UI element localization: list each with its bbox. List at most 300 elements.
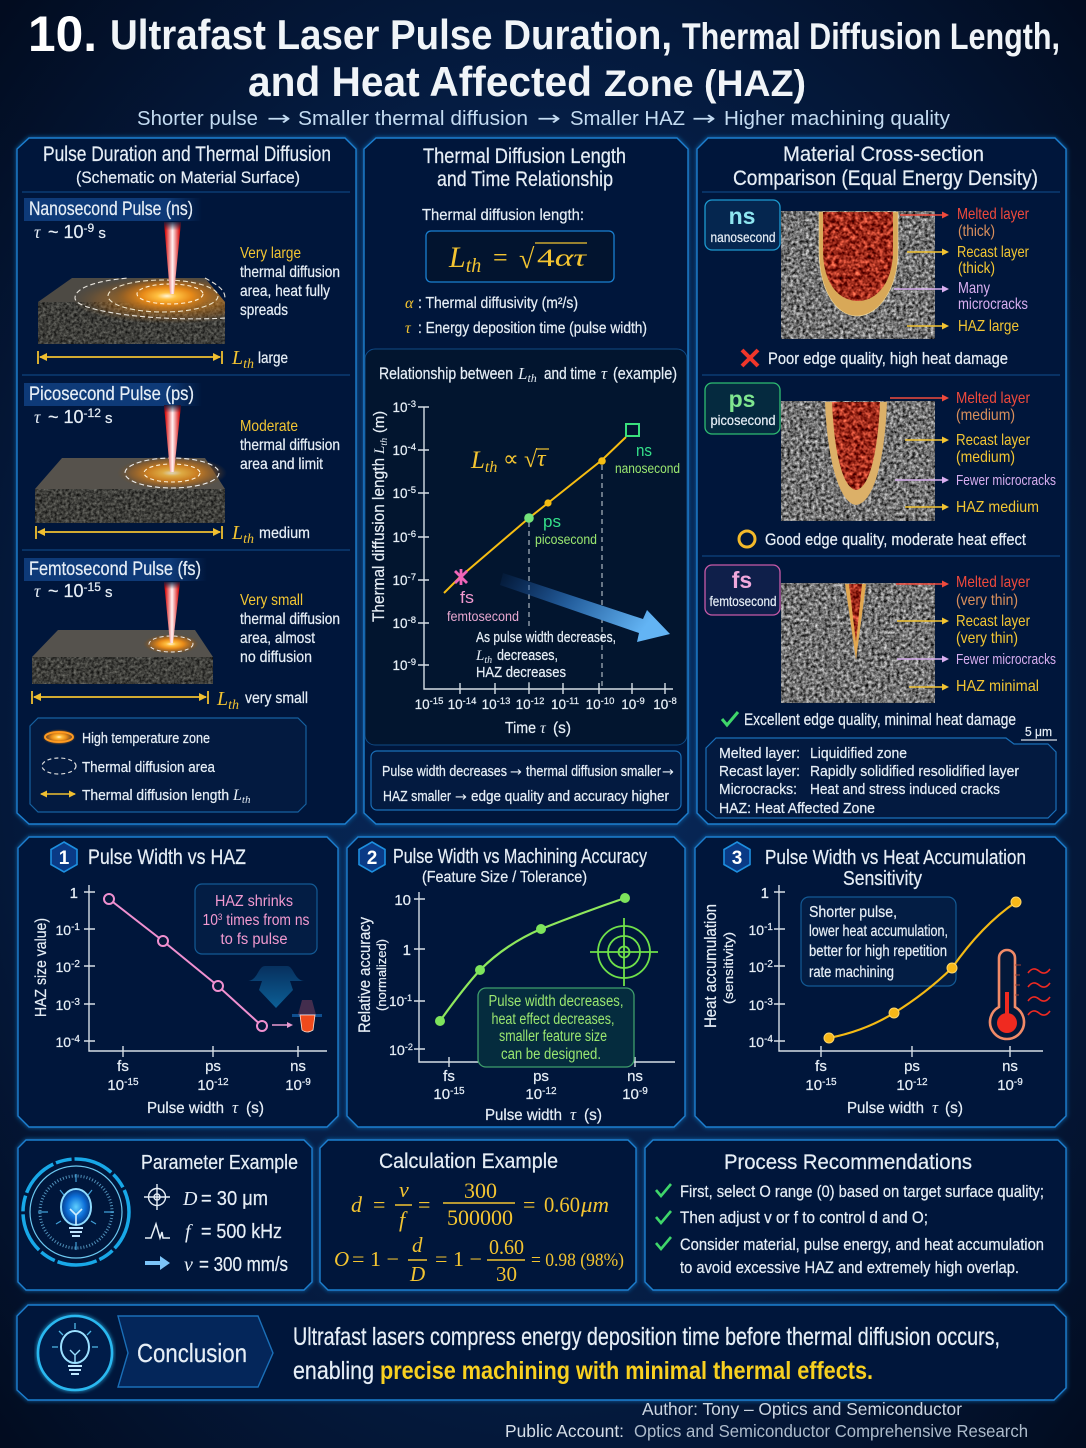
y axis tick labels: -9 (408, 657, 416, 668)
arrow: Lth very small (32, 688, 308, 713)
icon: laser beam ps (164, 405, 181, 472)
formula label: Thermal diffusion length: (422, 207, 584, 224)
line chart: HAZ: -2 (71, 959, 80, 970)
title: and Heat Affected (248, 58, 592, 105)
line chart: HAZ: -9 (302, 1077, 311, 1088)
fs callouts: Melted layer (956, 574, 1031, 591)
panel heading (43, 143, 331, 187)
line chart: heat accumulation: 10 (997, 1077, 1014, 1094)
chart annotation: L (476, 648, 484, 664)
axis titles: th (379, 438, 390, 446)
ns callouts: Melted layer (957, 206, 1030, 223)
y axis tick labels: -5 (408, 485, 416, 496)
x axis tick labels: -13 (497, 696, 510, 707)
panel heading: Pulse Duration and Thermal Diffusion (43, 143, 331, 166)
title: Zone (HAZ) (604, 63, 806, 104)
line chart: accuracy: 10 (433, 1086, 450, 1103)
icon: heat waves (1028, 969, 1050, 1015)
line chart: heat accumulation: -12 (913, 1077, 928, 1088)
ns comparison row (705, 200, 1030, 368)
heading: Pulse Width vs HAZ (88, 845, 246, 869)
summary box: thermal diffusion smaller (526, 763, 661, 780)
fs callouts: (very thin) (956, 592, 1018, 609)
author credit: Author: Tony – Optics and Semiconductor (642, 1399, 962, 1419)
chart title: L (518, 364, 527, 383)
line chart: heat accumulation: fs (815, 1058, 827, 1075)
chart annotation: decreases, (497, 647, 558, 664)
callout: HAZ shrinks: times from ns (222, 912, 310, 929)
variable definitions: τ (405, 320, 412, 337)
y axis tick labels: -7 (408, 572, 416, 583)
ns badge: nanosecond (710, 229, 776, 245)
formula box: = (493, 243, 508, 272)
formula: line spacing: 500000 (447, 1205, 513, 1230)
line chart: HAZ: 10 (56, 922, 71, 938)
conclusion text (293, 1323, 1000, 1385)
y axis tick labels: 10 (393, 486, 408, 501)
femtosecond section (24, 558, 340, 713)
panel: thermal diffusion length and time relationship (364, 138, 688, 824)
chart annotation (475, 629, 616, 681)
y axis tick labels (393, 399, 416, 673)
ns label: nanosecond (615, 461, 680, 476)
arrow: Lth very small: very small (245, 690, 308, 707)
picosecond section: s (101, 410, 113, 427)
formula: line spacing: μm (580, 1192, 609, 1217)
glossary box: HAZ: Heat Affected Zone (719, 800, 875, 817)
icon: number badge 2 (359, 842, 385, 872)
glossary box (706, 738, 1056, 818)
heading: (Feature Size / Tolerance) (422, 869, 587, 886)
parameter f: = 500 kHz (201, 1221, 282, 1243)
title: 10. (28, 6, 97, 62)
picosecond section (24, 383, 340, 547)
variable definitions: : Thermal diffusivity (m²/s) (418, 295, 578, 312)
line chart: accuracy: 10 (389, 993, 405, 1009)
fs label (447, 588, 519, 624)
axis titles: L (372, 446, 388, 454)
axis titles: τ (540, 720, 547, 737)
glossary box: Heat and stress induced cracks (810, 781, 1000, 798)
formula: overlap: D (409, 1262, 425, 1286)
femtosecond section: ~ 10 (48, 581, 84, 601)
legend: high temperature zone: High temperature zone (82, 730, 210, 747)
fs callouts (896, 574, 1056, 695)
formula: overlap: = 0.98 (98%) (531, 1250, 624, 1271)
summary box: → (662, 765, 674, 780)
line chart: HAZ: fs (117, 1058, 129, 1075)
subtitle: Higher machining quality (724, 108, 950, 130)
ps label (535, 512, 597, 547)
variable definitions: : Energy deposition time (pulse width) (418, 320, 647, 337)
y axis tick labels: -6 (408, 529, 416, 540)
line chart: accuracy: Pulse width (485, 1107, 562, 1124)
thermal area note ns: Very large (240, 245, 301, 262)
callout: shorter pulse: rate machining (809, 964, 894, 981)
public account credit: Public Account: (505, 1421, 624, 1441)
line chart: HAZ: (s) (246, 1100, 264, 1117)
y axis tick labels: 10 (393, 616, 408, 631)
parameter v: = 300 mm/s (199, 1254, 288, 1276)
arrow: Lth very small: L (217, 688, 228, 710)
summary box (371, 751, 681, 810)
line chart: heat accumulation: ps (904, 1058, 920, 1075)
y axis tick labels: -4 (408, 442, 416, 453)
line chart: accuracy: -9 (639, 1086, 648, 1097)
formula: line spacing: 0.60 (544, 1192, 580, 1217)
subtitle: → (692, 106, 716, 130)
ns callouts: Many (958, 280, 990, 297)
panel heading: (Schematic on Material Surface) (76, 168, 300, 187)
icon: thermometer (990, 950, 1024, 1039)
summary box: Pulse width decreases (382, 763, 507, 780)
y axis tick labels: 10 (393, 400, 408, 415)
callout: HAZ shrinks: HAZ shrinks (215, 893, 293, 910)
picosecond section: τ (34, 407, 41, 427)
line chart: accuracy: 10 (394, 892, 411, 909)
recommendation 3 (656, 1235, 1044, 1277)
legend: thermal diffusion area: Thermal diffusion area (82, 759, 216, 776)
fs cross-section image (781, 583, 935, 703)
thermal area note ps: Moderate (240, 418, 298, 435)
parameter f (145, 1221, 282, 1243)
parameter v (145, 1254, 288, 1276)
ps verdict: Good edge quality, moderate heat effect (765, 531, 1026, 549)
glossary box: Recast layer: (719, 763, 800, 780)
ns callouts: Recast layer (957, 244, 1030, 261)
fs callouts: (very thin) (956, 630, 1018, 647)
y axis tick labels: 10 (393, 573, 408, 588)
heading: Sensitivity (843, 868, 922, 890)
ps callouts: Fewer microcracks (956, 472, 1056, 489)
arrow: downward shrink (247, 966, 305, 1008)
ps label: ps (543, 512, 561, 531)
legend: thermal diffusion length: L (233, 787, 242, 804)
line chart: accuracy: (normalized) (374, 939, 389, 1011)
title (28, 6, 1060, 105)
x axis tick labels: 10 (551, 697, 566, 712)
summary box: edge quality and accuracy higher (471, 788, 669, 805)
panel heading: Comparison (Equal Energy Density) (733, 166, 1038, 190)
parameter D: = 30 μm (201, 1188, 268, 1210)
heading: Calculation Example (379, 1149, 558, 1173)
ns callouts: (thick) (958, 223, 995, 240)
conclusion text: precise machining with minimal thermal effects. (380, 1357, 873, 1385)
line chart: accuracy (355, 892, 675, 1124)
x axis tick labels: 10 (415, 697, 430, 712)
thermal area note fs: thermal diffusion (240, 611, 340, 628)
panel heading (423, 144, 626, 191)
panel: process recommendations (645, 1140, 1066, 1290)
line chart: accuracy: (s) (584, 1107, 602, 1124)
line chart: accuracy: -15 (450, 1086, 465, 1097)
conclusion label (118, 1316, 273, 1387)
formula: line spacing: f (399, 1207, 408, 1232)
x axis tick labels: -9 (636, 696, 645, 707)
line chart: HAZ: -4 (71, 1034, 80, 1045)
legend: high temperature zone (42, 729, 210, 747)
arrow: Lth medium: medium (259, 525, 310, 542)
line chart: HAZ: -3 (71, 997, 80, 1008)
nanosecond section: τ (34, 222, 41, 242)
line chart: HAZ: HAZ size value) (33, 918, 50, 1017)
y axis tick labels: 10 (393, 530, 408, 545)
legend: thermal diffusion length: Thermal diffusion length (82, 787, 229, 804)
icon: number badge 3: 3 (732, 848, 742, 869)
x axis tick labels: -10 (601, 696, 614, 707)
parameter v: v (184, 1254, 193, 1276)
proportionality label: τ (537, 446, 547, 472)
nanosecond section (24, 198, 340, 372)
summary box: → (455, 790, 467, 805)
panel: pulse width vs machining accuracy (347, 837, 685, 1127)
ns label (615, 441, 680, 476)
recommendation 2: Then adjust v or f to control d and O; (680, 1208, 928, 1227)
line chart: HAZ: ps (205, 1058, 221, 1075)
conclusion text: enabling (293, 1357, 374, 1385)
ps callouts: HAZ medium (956, 499, 1039, 516)
legend: thermal diffusion length: th (242, 794, 251, 806)
thermal area note ps: area and limit (240, 456, 323, 473)
x axis tick labels: 10 (516, 697, 531, 712)
heading: Pulse Width vs Heat Accumulation (765, 847, 1026, 869)
subtitle: Shorter pulse (137, 108, 258, 130)
y axis tick labels: -8 (408, 615, 416, 626)
line chart: heat accumulation: 10 (749, 922, 764, 938)
thermal area note fs: no diffusion (240, 649, 312, 666)
subtitle: → (267, 106, 291, 130)
line chart: accuracy: fs (443, 1068, 455, 1085)
line chart: accuracy: ns (627, 1068, 643, 1085)
fs badge: femtosecond (710, 593, 776, 609)
line chart: heat accumulation: 10 (805, 1077, 822, 1094)
ns badge: ns (729, 203, 755, 229)
chart title: τ (601, 364, 608, 383)
panel: calculation example (320, 1140, 636, 1290)
line chart: accuracy: 10 (389, 1042, 405, 1058)
femtosecond section: Femtosecond Pulse (fs) (29, 559, 201, 580)
femtosecond section: τ (34, 581, 41, 601)
line chart: heat accumulation: 10 (749, 997, 764, 1013)
arrow: Lth medium: L (232, 522, 243, 544)
callout: shorter pulse (801, 897, 956, 986)
line chart: accuracy: Relative accuracy (355, 917, 374, 1033)
fs comparison row (705, 565, 1056, 729)
arrow: Lth large: L (232, 347, 243, 369)
ps cross-section image (781, 401, 935, 521)
x axis tick labels (415, 696, 677, 712)
x axis tick labels: 10 (586, 697, 601, 712)
line chart: heat accumulation: (s) (945, 1100, 963, 1117)
parameter D: D (182, 1188, 198, 1210)
arrow: Lth large: th (243, 357, 254, 372)
fs label: femtosecond (447, 609, 519, 624)
arrow: Lth medium: th (243, 532, 254, 547)
panel: conclusion (17, 1305, 1066, 1400)
proportionality label: L (471, 447, 485, 474)
line chart: HAZ: Pulse width (147, 1100, 224, 1117)
line chart: accuracy: 10 (622, 1086, 639, 1103)
axis titles: (m) (371, 411, 388, 433)
icon: laser beam ns (164, 222, 181, 294)
chart annotation: HAZ decreases (476, 664, 566, 681)
formula: overlap: = 1 − (435, 1247, 482, 1271)
line chart: heat accumulation: 10 (896, 1077, 913, 1094)
thermal area note ps (240, 418, 340, 473)
title: Ultrafast Laser Pulse Duration, (110, 11, 672, 58)
line chart: heat accumulation: -2 (764, 959, 773, 970)
line chart: HAZ: 10 (56, 997, 71, 1013)
icon: conclusion bulb (38, 1316, 112, 1390)
line chart: HAZ: 10 (285, 1077, 302, 1094)
thermal area note ns: spreads (240, 302, 288, 319)
thermal area note ns (240, 245, 340, 319)
axis titles (370, 411, 571, 737)
line chart: HAZ (33, 885, 327, 1117)
heading: Parameter Example (141, 1151, 298, 1174)
panel heading: and Time Relationship (437, 167, 613, 191)
y axis tick labels: 10 (393, 443, 408, 458)
ns callouts: (thick) (958, 260, 995, 277)
parameter f: f (185, 1221, 193, 1243)
x axis tick labels: 10 (448, 697, 463, 712)
proportionality label: th (485, 459, 497, 476)
glossary box: Rapidly solidified resolidified layer (810, 763, 1019, 780)
line chart: HAZ: 10 (107, 1077, 124, 1094)
femtosecond section: -15 (84, 580, 101, 594)
chart: Lth vs time (365, 349, 687, 745)
callout: feature size: smaller feature size (499, 1028, 607, 1045)
formula: line spacing: = (373, 1192, 385, 1217)
proportionality label: √ (524, 447, 538, 473)
line chart: heat accumulation: -9 (1014, 1077, 1023, 1088)
ps callouts: Melted layer (956, 390, 1031, 407)
x axis tick labels: 10 (653, 697, 668, 712)
summary box: → (510, 765, 522, 780)
formula: line spacing: = (418, 1192, 430, 1217)
icon: laser beam fs (164, 582, 180, 643)
line chart: accuracy: τ (570, 1105, 577, 1124)
line chart: HAZ: -12 (214, 1077, 229, 1088)
nanosecond section: ~ 10 (48, 222, 84, 242)
glossary box: Melted layer: (719, 745, 800, 762)
axis titles: (s) (553, 720, 571, 737)
line chart: accuracy: ps (533, 1068, 549, 1085)
x axis tick labels: 10 (482, 697, 497, 712)
callout: feature size (478, 988, 634, 1067)
thermal area note ns: area, heat fully (240, 283, 330, 300)
line chart: HAZ: 1 (70, 885, 78, 902)
heading (393, 846, 647, 886)
arrow: to crater (272, 1022, 293, 1028)
formula: line spacing: = (523, 1192, 535, 1217)
icon: light bulb gauge (23, 1159, 129, 1265)
icon: small HAZ crater (292, 1000, 322, 1032)
formula: overlap: 30 (496, 1262, 517, 1286)
glossary box: Liquidified zone (810, 745, 907, 762)
line chart: heat accumulation: 10 (749, 1034, 764, 1050)
chart title: (example) (613, 365, 677, 383)
x axis tick labels: -12 (531, 696, 544, 707)
arrow: Lth large (38, 347, 288, 372)
panel heading: Material Cross-section (783, 142, 984, 166)
line chart: HAZ: 10 (56, 1034, 71, 1050)
x axis tick labels: -11 (566, 696, 579, 707)
callout: shorter pulse: lower heat accumulation, (809, 923, 948, 940)
public account credit: Optics and Semiconductor Comprehensive Research (634, 1421, 1028, 1441)
callout: HAZ shrinks: to fs pulse (220, 931, 288, 948)
icon: number badge 1 (51, 842, 77, 872)
formula: line spacing: v (399, 1177, 409, 1202)
icon: material block ps (35, 456, 227, 523)
line chart: HAZ: 10 (56, 959, 71, 975)
formula: overlap: O (334, 1247, 349, 1271)
icon: number badge 1: 1 (59, 848, 70, 869)
subtitle: Smaller thermal diffusion (298, 108, 528, 130)
line chart: heat accumulation: 10 (749, 959, 764, 975)
callout: shorter pulse: better for high repetition (809, 943, 947, 960)
conclusion label: Conclusion (137, 1338, 247, 1368)
axis titles: Thermal diffusion length (370, 458, 388, 622)
fs callouts: HAZ minimal (956, 678, 1039, 695)
panel: parameter example (18, 1140, 312, 1290)
formula box: th (466, 255, 481, 277)
ns badge (705, 200, 780, 250)
nanosecond section: s (94, 225, 106, 242)
formula: line spacing (351, 1177, 609, 1232)
fs verdict: Excellent edge quality, minimal heat damage (744, 711, 1016, 729)
fs callouts: Fewer microcracks (956, 651, 1056, 668)
ps callouts (890, 390, 1056, 516)
heading (765, 847, 1026, 890)
fs callouts: Recast layer (956, 613, 1031, 630)
ns cross-section image (781, 211, 935, 339)
ps comparison row (705, 383, 1056, 549)
panel: pulse duration and thermal diffusion (17, 138, 356, 824)
arrow: Lth medium (36, 522, 310, 547)
femtosecond section: s (101, 584, 113, 601)
line chart: heat accumulation: (sensitivity) (721, 932, 736, 1004)
line chart: heat accumulation: -4 (764, 1034, 773, 1045)
nanosecond section: -9 (84, 221, 95, 235)
fs badge: fs (732, 567, 752, 593)
fs marker (455, 569, 467, 585)
icon: material block fs (32, 630, 213, 684)
heading: Pulse Width vs Machining Accuracy (393, 846, 647, 868)
ps badge: ps (729, 386, 755, 412)
y axis tick labels: -3 (408, 399, 416, 410)
axis titles: Time (505, 720, 536, 737)
chart annotation: th (484, 655, 492, 666)
line chart: accuracy: 10 (525, 1086, 542, 1103)
legend: thermal diffusion area (42, 758, 216, 776)
thermal area note fs: Very small (240, 592, 303, 609)
arrow: Lth very small: th (228, 698, 239, 713)
heading: Process Recommendations (724, 1150, 972, 1174)
formula: overlap: = 1 − (352, 1247, 399, 1271)
line chart: accuracy: -12 (542, 1086, 557, 1097)
proportionality label: ∝ (503, 446, 519, 471)
line chart: HAZ: 10 (197, 1077, 214, 1094)
chart title: and time (544, 365, 596, 383)
subtitle (137, 106, 950, 130)
panel heading: Thermal Diffusion Length (423, 144, 626, 168)
fs badge (705, 565, 780, 615)
panel heading (733, 142, 1038, 190)
subtitle: Smaller HAZ (570, 108, 685, 130)
icon: target (590, 918, 658, 986)
thermal area note ps: thermal diffusion (240, 437, 340, 454)
